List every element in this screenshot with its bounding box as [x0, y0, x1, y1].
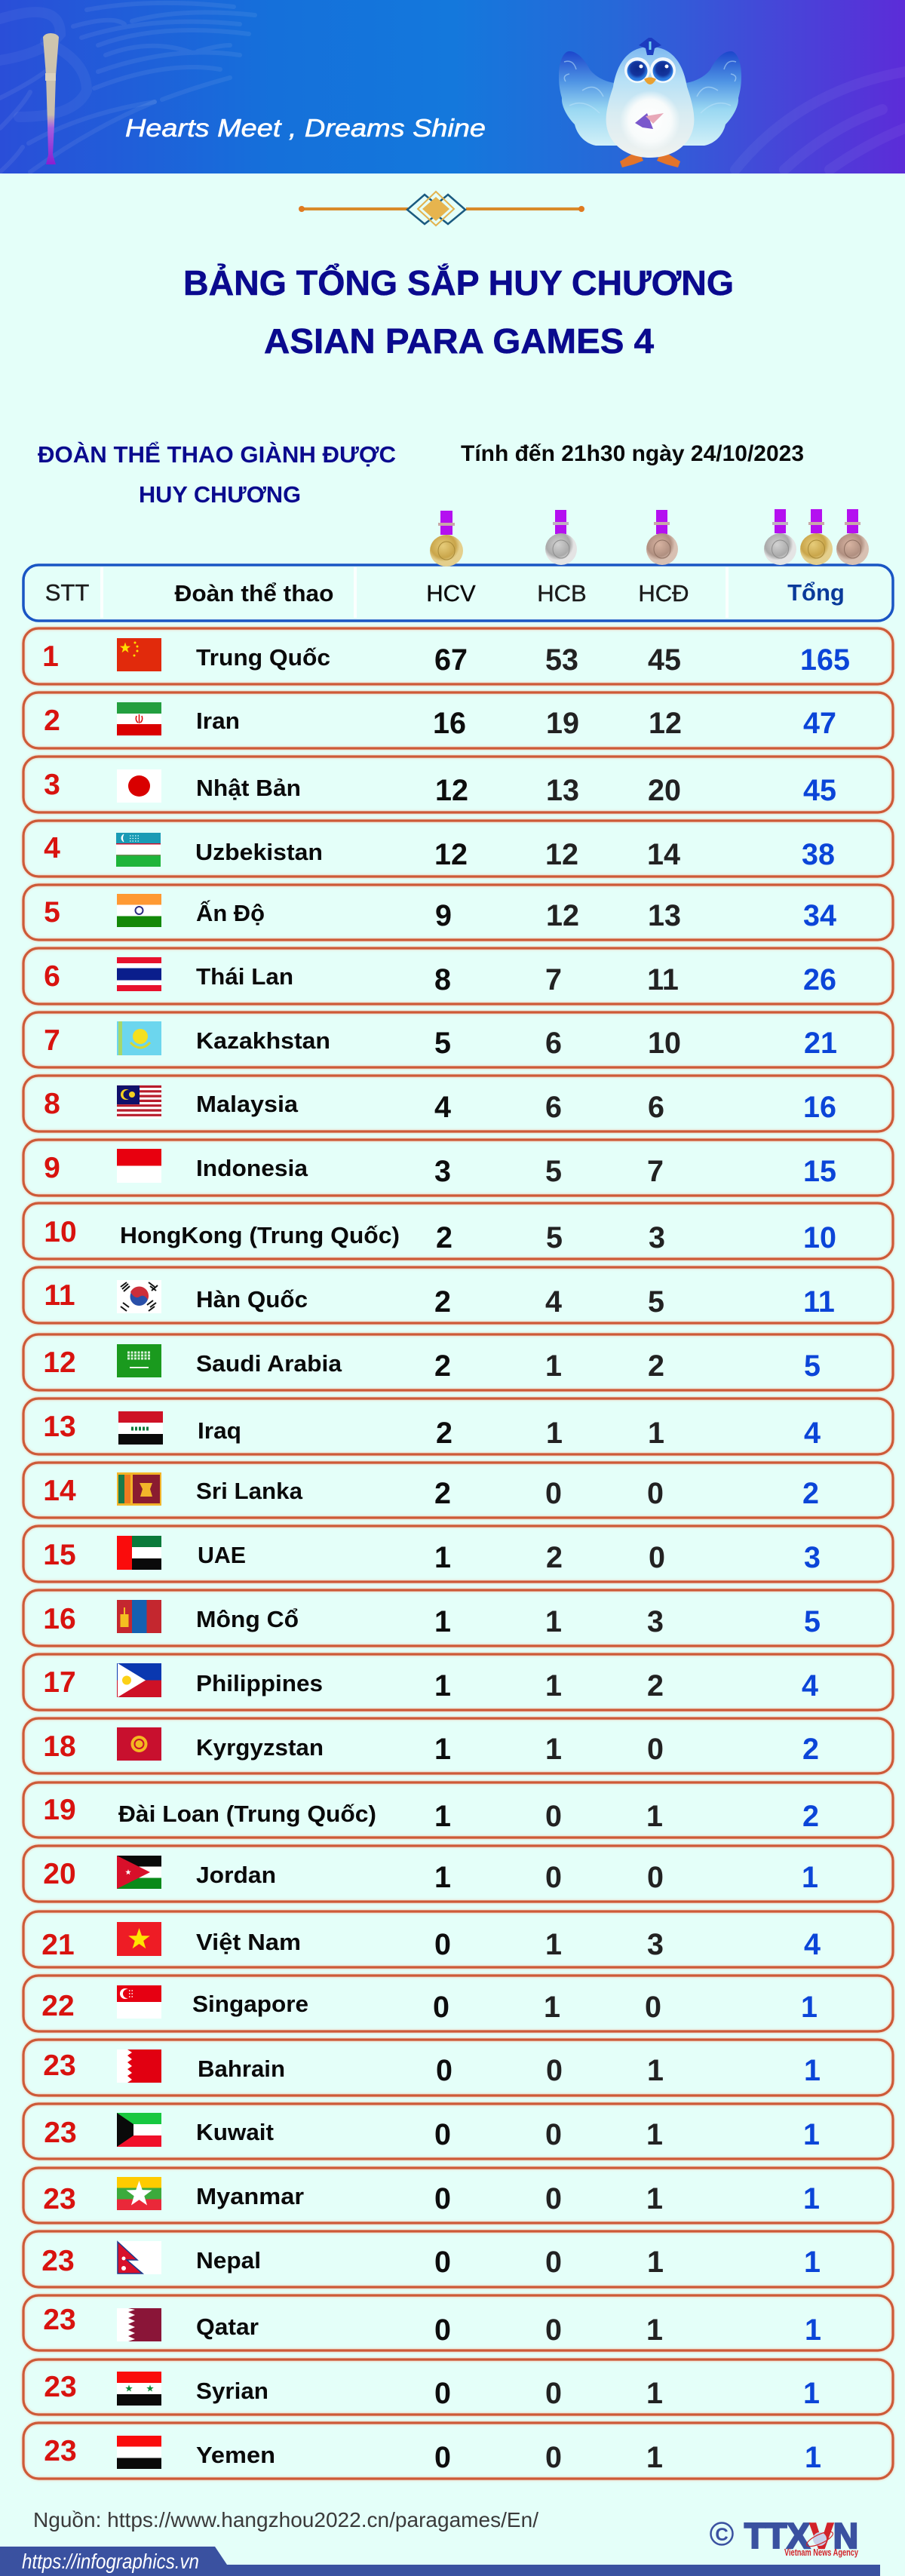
counts: 0	[434, 2182, 451, 2215]
row 23: Myanmar	[23, 2168, 893, 2223]
row 21: Việt Nam	[23, 1911, 893, 1967]
flag: Thailand	[117, 957, 161, 991]
name: Indonesia	[196, 1155, 308, 1181]
counts: 1	[646, 2182, 663, 2215]
row 12: Saudi Arabia	[23, 1334, 893, 1390]
counts: 1	[801, 1991, 818, 2024]
counts: 53	[545, 643, 578, 677]
name: Saudi Arabia	[196, 1350, 342, 1377]
name: Đài Loan (Trung Quốc)	[118, 1801, 376, 1827]
counts: 1	[545, 1669, 562, 1702]
rank: 5	[44, 896, 60, 929]
counts: 0	[649, 1541, 665, 1574]
flag: Kuwait	[117, 2113, 161, 2147]
counts: 2	[648, 1349, 664, 1383]
counts: 1	[544, 1991, 560, 2024]
counts: 1	[805, 2441, 821, 2474]
icon: three medals for total	[764, 509, 869, 565]
row 22: Singapore	[23, 1976, 893, 2031]
counts: 20	[648, 774, 681, 807]
counts: 0	[545, 2377, 562, 2410]
counts	[436, 2054, 821, 2087]
counts: 4	[434, 1091, 451, 1124]
belly logo	[635, 113, 653, 129]
counts: 2	[434, 1349, 451, 1383]
counts: 2	[436, 1417, 452, 1450]
flag: Singapore	[117, 1985, 161, 2019]
rank: 3	[44, 769, 60, 801]
row 1: Trung Quốc	[23, 628, 893, 684]
counts: 2	[647, 1669, 664, 1702]
counts: 10	[648, 1027, 681, 1060]
beak	[644, 77, 656, 84]
counts: 1	[647, 2246, 664, 2279]
table header: HCĐ	[638, 580, 689, 606]
flag: Iran	[117, 702, 161, 735]
rank: 23	[43, 2304, 76, 2336]
title	[183, 263, 734, 361]
counts	[434, 1669, 818, 1702]
logo: TTXVN: TTXVN	[744, 2516, 858, 2556]
title: ASIAN PARA GAMES 4	[264, 321, 654, 361]
counts: 1	[434, 1669, 451, 1702]
name: Trung Quốc	[196, 644, 330, 671]
left wing	[559, 51, 622, 146]
name: UAE	[198, 1542, 246, 1568]
table header: HCV	[426, 580, 476, 606]
name: Kazakhstan	[196, 1027, 330, 1054]
flag: Kazakhstan	[117, 1021, 161, 1055]
counts	[434, 1928, 821, 1961]
counts: 2	[802, 1477, 819, 1510]
rank: 23	[41, 2245, 75, 2277]
row 23: Syrian	[23, 2360, 893, 2415]
row 20: Jordan	[23, 1846, 893, 1902]
counts: 0	[433, 1991, 449, 2024]
date note: Tính đến 21h30 ngày 24/10/2023	[461, 441, 804, 466]
name: Iran	[196, 708, 240, 734]
counts	[434, 1733, 819, 1766]
row 8: Malaysia	[23, 1076, 893, 1131]
counts: 2	[434, 1477, 451, 1510]
counts: 0	[545, 2118, 562, 2151]
flag: Yemen	[117, 2436, 161, 2469]
counts: 4	[545, 1285, 562, 1319]
counts: 4	[804, 1417, 821, 1450]
counts: 1	[545, 1605, 562, 1638]
icon: silver medal	[545, 510, 577, 565]
counts: 0	[545, 2182, 562, 2215]
row 15: UAE	[23, 1526, 893, 1582]
rank: 6	[44, 960, 60, 993]
rank: 11	[44, 1279, 75, 1312]
counts: 1	[434, 1800, 451, 1833]
counts	[434, 643, 850, 677]
counts: 5	[804, 1349, 821, 1383]
counts: 0	[546, 2054, 563, 2087]
row 17: Philippines	[23, 1654, 893, 1710]
counts	[435, 899, 836, 932]
counts: 1	[646, 1800, 663, 1833]
counts: 9	[435, 899, 452, 932]
counts: 16	[803, 1091, 836, 1124]
counts: 5	[804, 1605, 821, 1638]
rank: 22	[41, 1990, 75, 2022]
counts: 11	[647, 963, 679, 996]
counts: 2	[802, 1733, 819, 1766]
icon: torch	[43, 33, 59, 164]
flag: South Korea	[117, 1280, 161, 1313]
counts: 0	[545, 1477, 562, 1510]
name: Thái Lan	[196, 963, 293, 990]
name: Malaysia	[196, 1091, 299, 1117]
flag: Kyrgyzstan	[117, 1727, 161, 1761]
name: Myanmar	[196, 2183, 304, 2209]
counts: 8	[434, 963, 451, 996]
counts: 38	[802, 838, 835, 871]
counts: 26	[803, 963, 836, 996]
row 23: Qatar	[23, 2295, 893, 2350]
name: Iraq	[198, 1417, 241, 1444]
rank: 10	[44, 1216, 77, 1248]
rank: 19	[43, 1794, 76, 1826]
row 3: Nhật Bản	[23, 757, 893, 812]
counts: 5	[545, 1155, 562, 1188]
counts: 4	[802, 1669, 818, 1702]
counts: 6	[545, 1027, 562, 1060]
name: Việt Nam	[196, 1929, 301, 1955]
counts	[434, 1091, 836, 1124]
counts: 11	[803, 1285, 835, 1319]
row 7: Kazakhstan	[23, 1012, 893, 1067]
counts	[434, 1027, 837, 1060]
rank: 13	[43, 1411, 76, 1443]
logo: TTXVN: C	[715, 2525, 729, 2545]
counts: 5	[546, 1221, 563, 1254]
row 23: Yemen	[23, 2423, 893, 2479]
table header: STT	[45, 579, 89, 606]
rank: 8	[44, 1088, 60, 1120]
name: Yemen	[196, 2442, 275, 2468]
counts: 3	[649, 1221, 665, 1254]
website url: https://infographics.vn	[22, 2550, 199, 2573]
rank: 23	[43, 2183, 76, 2215]
counts: 1	[646, 2377, 663, 2410]
name: Kuwait	[196, 2119, 274, 2145]
source line: Nguồn: https://www.hangzhou2022.cn/paragames/En/	[33, 2508, 538, 2531]
counts: 0	[434, 2118, 451, 2151]
flag: Indonesia	[117, 1149, 161, 1183]
counts: 1	[803, 2118, 820, 2151]
counts: 1	[646, 2118, 663, 2151]
counts	[433, 707, 836, 740]
counts: 15	[803, 1155, 836, 1188]
counts: 3	[434, 1155, 451, 1188]
flag: Philippines	[117, 1663, 161, 1697]
counts: 0	[436, 2054, 452, 2087]
flag: Japan	[117, 769, 161, 803]
counts	[434, 1477, 819, 1510]
icon: mascot bird	[559, 38, 741, 167]
counts: 6	[545, 1091, 562, 1124]
counts: 1	[545, 1733, 562, 1766]
counts	[434, 1285, 835, 1319]
counts: 12	[649, 707, 682, 740]
counts: 1	[546, 1417, 563, 1450]
counts: 45	[803, 774, 836, 807]
counts: 3	[804, 1541, 821, 1574]
flag: Mongolia	[117, 1600, 161, 1633]
counts: 19	[546, 707, 579, 740]
row 11: Hàn Quốc	[23, 1267, 893, 1323]
counts: 1	[646, 2313, 663, 2347]
name: HongKong (Trung Quốc)	[120, 1222, 400, 1248]
name: Jordan	[196, 1862, 276, 1888]
name: Hàn Quốc	[196, 1286, 308, 1313]
rank: 23	[44, 2371, 77, 2403]
name: Syrian	[196, 2378, 268, 2404]
row 4: Uzbekistan	[23, 821, 893, 877]
counts: 0	[434, 2377, 451, 2410]
rank: 17	[43, 1666, 76, 1699]
name: Mông Cổ	[196, 1606, 299, 1632]
counts: 1	[802, 1861, 818, 1894]
counts	[434, 1800, 819, 1833]
rank: 7	[44, 1024, 60, 1057]
counts: 1	[803, 2377, 820, 2410]
name: Nepal	[196, 2247, 261, 2274]
name: Sri Lanka	[196, 1478, 303, 1504]
counts: 0	[434, 2313, 451, 2347]
row 5: Ấn Độ	[23, 885, 893, 940]
counts: 45	[648, 643, 681, 677]
counts: 4	[804, 1928, 821, 1961]
counts: 0	[647, 1477, 664, 1510]
counts: 0	[645, 1991, 661, 2024]
flag: Iraq	[118, 1411, 163, 1445]
counts	[434, 2118, 820, 2151]
icon: gold medal	[430, 511, 463, 566]
rank: 21	[41, 1929, 75, 1961]
counts: 0	[434, 2246, 451, 2279]
rank: 4	[44, 832, 60, 864]
counts: 1	[545, 1349, 562, 1383]
right wing	[678, 51, 741, 146]
body	[606, 47, 694, 158]
flag: Viet Nam	[117, 1922, 161, 1956]
counts: 21	[804, 1027, 837, 1060]
row 23: Kuwait	[23, 2104, 893, 2159]
row 23: Bahrain	[23, 2040, 893, 2095]
counts: 0	[545, 1861, 562, 1894]
counts: 1	[805, 2313, 821, 2347]
rank: 15	[43, 1539, 76, 1571]
flag: Malaysia	[117, 1085, 161, 1119]
counts: 12	[435, 774, 468, 807]
icon: bronze medal	[646, 510, 678, 565]
counts	[434, 1605, 821, 1638]
rank: 20	[43, 1858, 76, 1890]
counts	[434, 1541, 821, 1574]
row 13: Iraq	[23, 1399, 893, 1454]
flag: Saudi Arabia	[117, 1344, 161, 1377]
counts: 1	[434, 1541, 451, 1574]
counts	[434, 2377, 820, 2410]
counts: 1	[804, 2054, 821, 2087]
counts: 13	[648, 899, 681, 932]
counts: 6	[648, 1091, 664, 1124]
counts: 67	[434, 643, 468, 677]
counts	[435, 774, 836, 807]
eyes	[624, 57, 650, 83]
row 19: Đài Loan	[23, 1782, 893, 1838]
rank: 9	[44, 1152, 60, 1184]
counts: 1	[647, 2054, 664, 2087]
name: Philippines	[196, 1670, 323, 1696]
name: Qatar	[196, 2313, 259, 2340]
flag: China	[117, 638, 161, 671]
flag: Bahrain	[117, 2049, 161, 2083]
counts: 5	[648, 1285, 664, 1319]
counts: 1	[646, 2441, 663, 2474]
counts	[436, 1221, 836, 1254]
row 9: Indonesia	[23, 1140, 893, 1196]
counts	[434, 1349, 821, 1383]
row 6: Thái Lan	[23, 948, 893, 1004]
name: Uzbekistan	[195, 839, 323, 865]
counts: 10	[803, 1221, 836, 1254]
title: BẢNG TỔNG SẮP HUY CHƯƠNG	[183, 263, 734, 302]
counts	[434, 2441, 821, 2474]
rank: 23	[44, 2435, 77, 2467]
rank: 12	[43, 1346, 76, 1379]
counts: 2	[434, 1285, 451, 1319]
name: Ấn Độ	[196, 900, 265, 926]
counts	[434, 2246, 821, 2279]
table header: HCB	[537, 580, 587, 606]
counts	[434, 963, 836, 996]
footer bar	[0, 2547, 880, 2576]
counts: 0	[647, 1861, 664, 1894]
counts: 47	[803, 707, 836, 740]
name: Kyrgyzstan	[196, 1734, 324, 1761]
counts: 13	[546, 774, 579, 807]
counts	[433, 1991, 818, 2024]
counts: 3	[647, 1928, 664, 1961]
counts: 3	[647, 1605, 664, 1638]
counts: 5	[434, 1027, 451, 1060]
flag: India	[117, 894, 161, 927]
table header	[23, 565, 893, 621]
counts: 2	[436, 1221, 452, 1254]
logo: TTXVN: Vietnam News Agency	[784, 2547, 859, 2558]
counts: 0	[647, 1733, 664, 1766]
counts: 7	[647, 1155, 664, 1188]
name: Nhật Bản	[196, 775, 301, 801]
crest	[639, 38, 661, 55]
flag: Jordan	[117, 1856, 161, 1889]
counts: 14	[647, 838, 680, 871]
rank: 16	[43, 1603, 76, 1635]
name: Singapore	[192, 1991, 308, 2017]
row 18: Kyrgyzstan	[23, 1718, 893, 1773]
flag: UAE	[117, 1536, 161, 1570]
counts: 34	[803, 899, 836, 932]
flag: Syria	[117, 2372, 161, 2406]
counts: 7	[545, 963, 562, 996]
table header: Tổng	[787, 579, 845, 606]
row 14: Sri Lanka	[23, 1463, 893, 1518]
banner	[0, 0, 905, 173]
subtitle: delegations: HUY CHƯƠNG	[139, 481, 301, 508]
row 2: Iran	[23, 692, 893, 748]
counts	[434, 1861, 818, 1894]
feet	[620, 152, 680, 167]
flag: Myanmar	[117, 2177, 161, 2210]
slogan: Hearts Meet , Dreams Shine	[125, 114, 486, 142]
counts: 0	[545, 2246, 562, 2279]
flag: Uzbekistan	[116, 833, 161, 867]
counts: 12	[434, 838, 468, 871]
counts: 1	[545, 1928, 562, 1961]
counts: 0	[434, 2441, 451, 2474]
row 10: HongKong	[23, 1203, 893, 1259]
decorative ornament	[299, 192, 584, 226]
counts	[434, 2313, 821, 2347]
counts: 2	[802, 1800, 819, 1833]
counts: 16	[433, 707, 466, 740]
counts: 0	[545, 2441, 562, 2474]
counts	[434, 2182, 820, 2215]
counts	[436, 1417, 821, 1450]
name: Bahrain	[198, 2056, 285, 2082]
row 16: Mông Cổ	[23, 1590, 893, 1646]
row 23: Nepal	[23, 2231, 893, 2287]
counts: 1	[434, 1861, 451, 1894]
counts: 12	[546, 899, 579, 932]
counts: 1	[648, 1417, 664, 1450]
counts: 165	[800, 643, 850, 677]
counts: 12	[545, 838, 578, 871]
counts	[434, 1155, 836, 1188]
flag: Nepal	[117, 2241, 161, 2274]
counts: 1	[434, 1605, 451, 1638]
rank: 1	[42, 640, 59, 673]
counts: 0	[545, 1800, 562, 1833]
rank: 18	[43, 1730, 76, 1763]
rank: 23	[44, 2117, 77, 2149]
counts: 0	[434, 1928, 451, 1961]
table header: Đoàn thể thao	[175, 580, 333, 606]
counts: 1	[803, 2182, 820, 2215]
subtitle: delegations: ĐOÀN THỂ THAO GIÀNH ĐƯỢC	[38, 441, 396, 468]
subtitle: delegations	[38, 441, 396, 508]
counts	[434, 838, 835, 871]
rank: 2	[44, 705, 60, 737]
counts: 1	[434, 1733, 451, 1766]
rank: 14	[43, 1475, 76, 1507]
flag: Qatar	[117, 2308, 161, 2341]
rank: 23	[43, 2049, 76, 2082]
flag: Sri Lanka	[117, 1472, 161, 1506]
counts: 2	[546, 1541, 563, 1574]
counts: 1	[804, 2246, 821, 2279]
counts: 0	[545, 2313, 562, 2347]
